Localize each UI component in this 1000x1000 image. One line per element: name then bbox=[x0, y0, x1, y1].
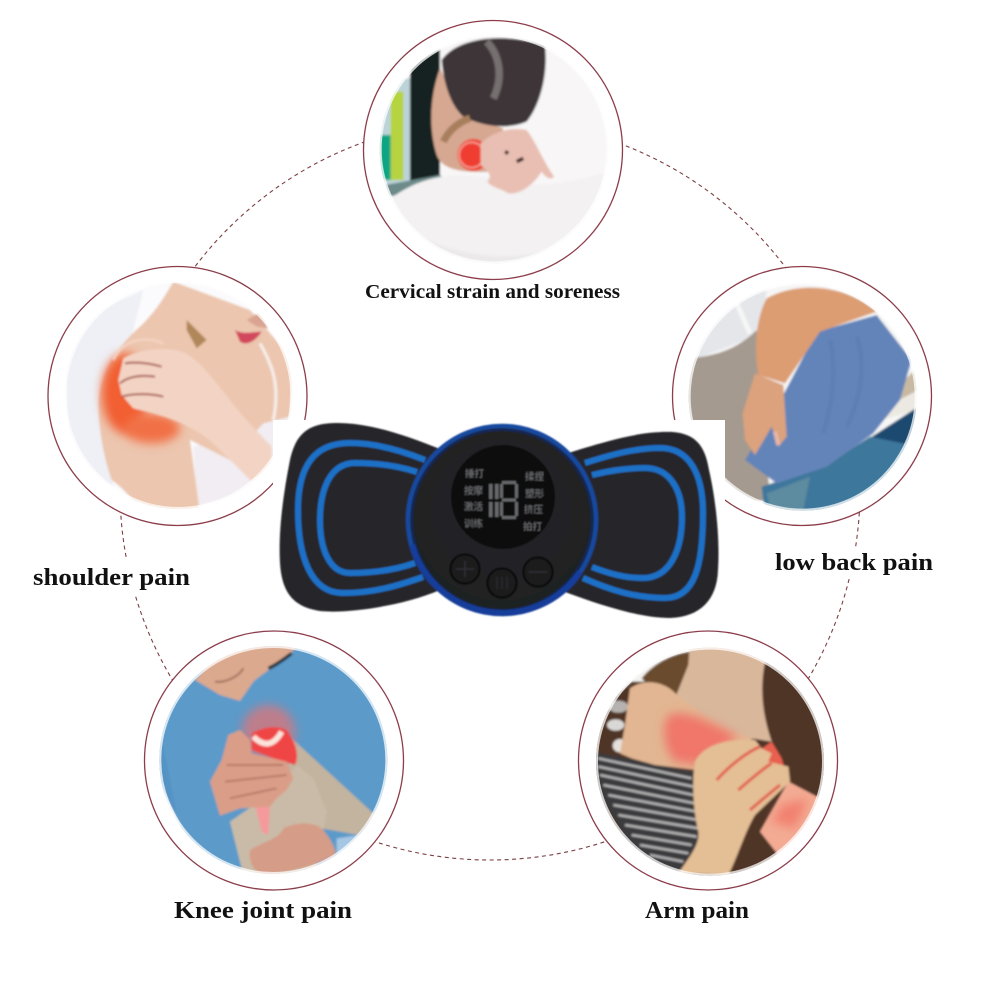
panel: cervical strain bbox=[364, 20, 622, 303]
photo: neck pain bbox=[380, 36, 606, 262]
photo: shoulder bbox=[66, 282, 292, 509]
ring: knee bbox=[144, 631, 404, 890]
label: low back bbox=[770, 547, 938, 579]
device: screen labels bbox=[464, 468, 544, 533]
device: screen labels: 捶打 bbox=[465, 468, 485, 480]
dashed connector ring bbox=[120, 120, 860, 860]
device: butterfly wings bbox=[280, 423, 719, 618]
device: screen labels: 挤压 bbox=[524, 504, 544, 516]
label: cervical: Cervical strain and soreness bbox=[365, 282, 620, 303]
label: low back: low back pain bbox=[775, 550, 933, 576]
panel: massager device bbox=[273, 420, 725, 627]
photo: arm bbox=[596, 648, 824, 876]
label: shoulder bbox=[28, 558, 198, 594]
label: shoulder: shoulder pain bbox=[33, 565, 190, 591]
ring: shoulder bbox=[48, 266, 307, 526]
label: knee: Knee joint pain bbox=[174, 898, 352, 924]
device: buttons bbox=[450, 554, 552, 598]
panel: shoulder pain bbox=[28, 266, 307, 594]
device: screen bbox=[451, 445, 555, 549]
ring: low back bbox=[672, 266, 932, 526]
device: screen labels: 揉捏 bbox=[525, 471, 544, 483]
device: screen labels: 按摩 bbox=[464, 485, 484, 497]
photo: knee bbox=[159, 646, 388, 874]
ring: arm bbox=[578, 631, 838, 890]
device: screen labels: 拍打 bbox=[523, 521, 542, 533]
photo: low back bbox=[688, 285, 916, 511]
device: screen labels: 激活 bbox=[464, 501, 484, 513]
device: control disc bbox=[408, 426, 596, 614]
ring: cervical bbox=[364, 20, 622, 280]
panel: arm pain bbox=[578, 631, 838, 924]
panel: knee joint pain bbox=[144, 631, 404, 924]
white backing bbox=[273, 420, 725, 627]
device: digital readout bbox=[489, 481, 518, 519]
device: screen labels: 训练 bbox=[464, 518, 484, 530]
device: screen labels: 塑形 bbox=[525, 488, 544, 500]
panel: low back pain bbox=[672, 266, 938, 579]
label: arm: Arm pain bbox=[645, 898, 749, 924]
